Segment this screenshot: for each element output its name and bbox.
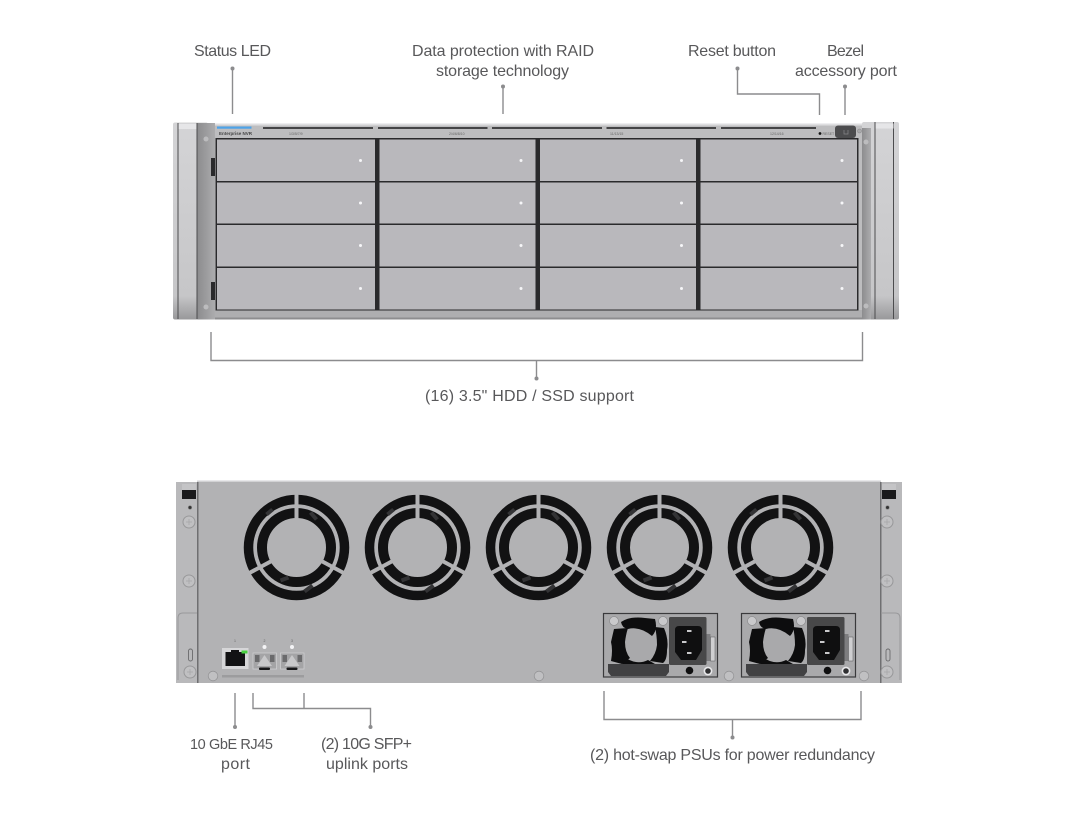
right rear ear xyxy=(880,482,902,683)
label: RAID data protection: storage technology xyxy=(436,63,569,80)
SFP+ port 2: 3 xyxy=(291,639,293,643)
bracket: power supplies xyxy=(604,691,861,740)
left rear ear xyxy=(176,482,198,683)
bay range labels: 12/14/16 xyxy=(770,132,784,136)
bracket: SFP+ ports xyxy=(253,693,372,729)
label: RAID data protection: Data protection with RAID xyxy=(412,43,594,60)
leader line: Status LED xyxy=(230,66,234,114)
leader line: Bezel accessory port xyxy=(843,84,847,115)
SFP+ port 2 xyxy=(280,639,304,670)
power supply 2 xyxy=(742,614,856,677)
bay range labels: 1/3/5/7/9 xyxy=(289,132,303,136)
top vent slots xyxy=(263,127,816,129)
bay range labels xyxy=(289,132,784,136)
RJ45 port: 1 xyxy=(234,639,236,643)
leader line: RJ45 port xyxy=(233,693,237,729)
drive indicator dots xyxy=(359,159,844,290)
label: hot-swap PSUs: (2) hot-swap PSUs for power redundancy xyxy=(590,747,875,764)
drive bay frame xyxy=(216,138,858,310)
panel: rear view of NVR chassis xyxy=(176,480,902,683)
label: SFP+ uplink ports xyxy=(321,736,412,773)
label: 10 GbE RJ45 port: port xyxy=(221,756,251,773)
leader line: RAID xyxy=(501,84,505,114)
label: 10 GbE RJ45 port: 10 GbE RJ45 xyxy=(190,737,273,753)
label: 10 GbE RJ45 port xyxy=(190,737,273,773)
bay range labels: 11/13/15 xyxy=(610,132,623,136)
label: SFP+ uplink ports: (2) 10G SFP+ xyxy=(321,736,412,753)
SFP+ port 1 xyxy=(253,639,276,670)
drive trays xyxy=(217,140,857,310)
RJ45 port xyxy=(222,639,248,669)
leader line: Reset button xyxy=(736,66,820,115)
label: Bezel accessory port xyxy=(795,43,898,115)
port label strips xyxy=(222,675,304,678)
label: RAID data protection xyxy=(412,43,594,114)
label: SFP+ uplink ports: uplink ports xyxy=(326,756,408,773)
label: HDD / SSD support: (16) 3.5" HDD / SSD support xyxy=(425,388,635,405)
label: Reset button xyxy=(688,43,820,115)
rear body xyxy=(197,480,881,683)
label: Status LED: Status LED xyxy=(194,43,271,60)
right rack ear xyxy=(862,122,899,320)
cooling fans xyxy=(246,492,830,596)
label: Status LED xyxy=(194,43,271,114)
label: Bezel accessory port: accessory port xyxy=(795,63,898,80)
chassis front body xyxy=(197,124,867,320)
power supply 1 xyxy=(604,614,718,677)
bracket: drive bays xyxy=(211,332,862,380)
status LED bar xyxy=(217,126,252,129)
SFP+ port 1: 2 xyxy=(264,639,266,643)
bezel accessory port xyxy=(835,126,862,138)
panel: front view of NVR chassis xyxy=(173,122,899,320)
left rack ear xyxy=(173,122,215,320)
label: Bezel accessory port: Bezel xyxy=(827,43,864,60)
chassis screws xyxy=(208,671,869,681)
reset hole and label: RESET xyxy=(822,132,835,136)
model name: Enterprise NVR xyxy=(219,131,253,136)
bay range labels: 2/4/6/8/10 xyxy=(449,132,465,136)
label: Reset button: Reset button xyxy=(688,43,776,60)
